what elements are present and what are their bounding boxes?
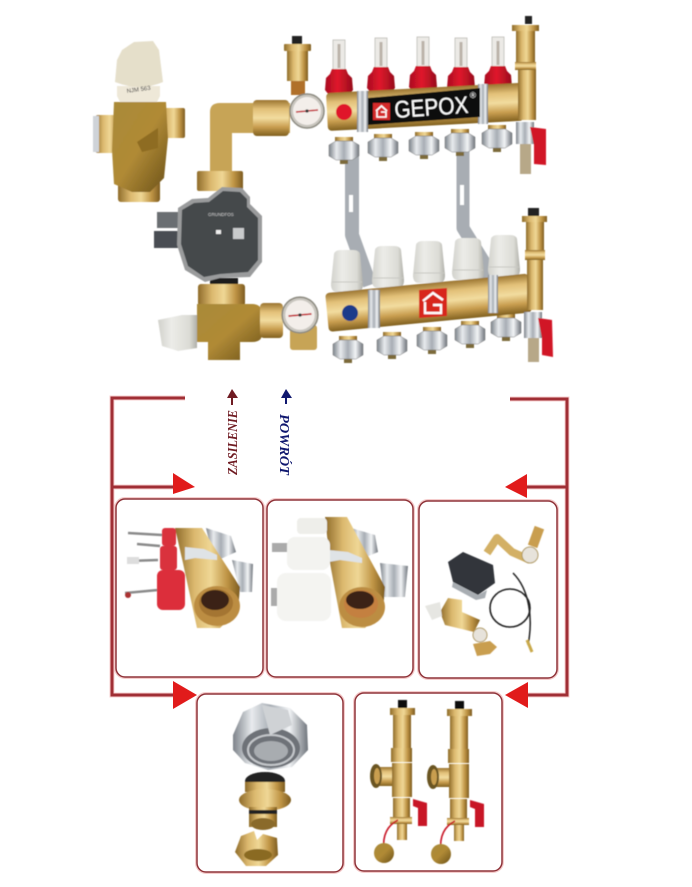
- connector lines and arrows: [112, 398, 567, 709]
- panel: red flow meter manifold: [116, 499, 263, 677]
- arrow: lower right: [505, 682, 528, 708]
- icon: circulation pump: [154, 187, 262, 288]
- arrow: return: [281, 389, 292, 404]
- text: supply: ZASILENIE: [226, 410, 241, 476]
- supply manifold: [326, 83, 524, 132]
- icon: elbow pipe: [197, 100, 290, 191]
- icon: circulation pump: GRUNDFOS: [208, 212, 234, 217]
- left connector lines: [112, 398, 185, 695]
- brand label: ®: [470, 91, 476, 100]
- icon: vent set left: [370, 700, 427, 863]
- panel: pump group: [419, 501, 557, 678]
- icon: flow meters: [325, 37, 512, 95]
- text: return: POWRÓT: [276, 414, 293, 476]
- icon: brackets: [351, 145, 484, 285]
- icon: white adjustment caps: [331, 235, 520, 292]
- panel: white cap manifold: [267, 500, 413, 677]
- panel: compression fitting: [197, 694, 343, 872]
- arrow: lower left: [173, 681, 197, 709]
- arrow: upper left: [173, 473, 195, 494]
- return manifold: [325, 274, 532, 332]
- icon: vent set right: [427, 701, 484, 864]
- brand label: [368, 88, 480, 125]
- panel: air vent sets: [355, 693, 502, 871]
- icon: pump valve with thermostatic head: [158, 284, 318, 360]
- right connector lines: [510, 399, 567, 695]
- icon: chrome nut: [233, 703, 308, 770]
- arrow: supply: [227, 389, 238, 405]
- icon: top air vent: [284, 36, 311, 95]
- icon: brass insert: [239, 772, 291, 830]
- icon: top pressure gauge: [290, 94, 324, 128]
- brand label: GEPOX: [394, 92, 469, 124]
- icon: lower right vent and drain valve: [522, 208, 553, 362]
- icon: red house logo: [419, 288, 447, 318]
- photo: manifold assembly: [93, 16, 553, 363]
- icon: thermostatic mixing valve: [93, 41, 185, 202]
- icon: lower compression nuts: [333, 314, 521, 363]
- flow labels: [226, 389, 293, 476]
- icon: thermostatic mixing valve: NJM 563: [126, 86, 152, 95]
- icon: split ring: [235, 831, 278, 866]
- icon: top right vent and drain valve: [512, 16, 546, 174]
- icon: top compression nuts: [329, 125, 512, 164]
- arrow: upper right: [505, 474, 527, 498]
